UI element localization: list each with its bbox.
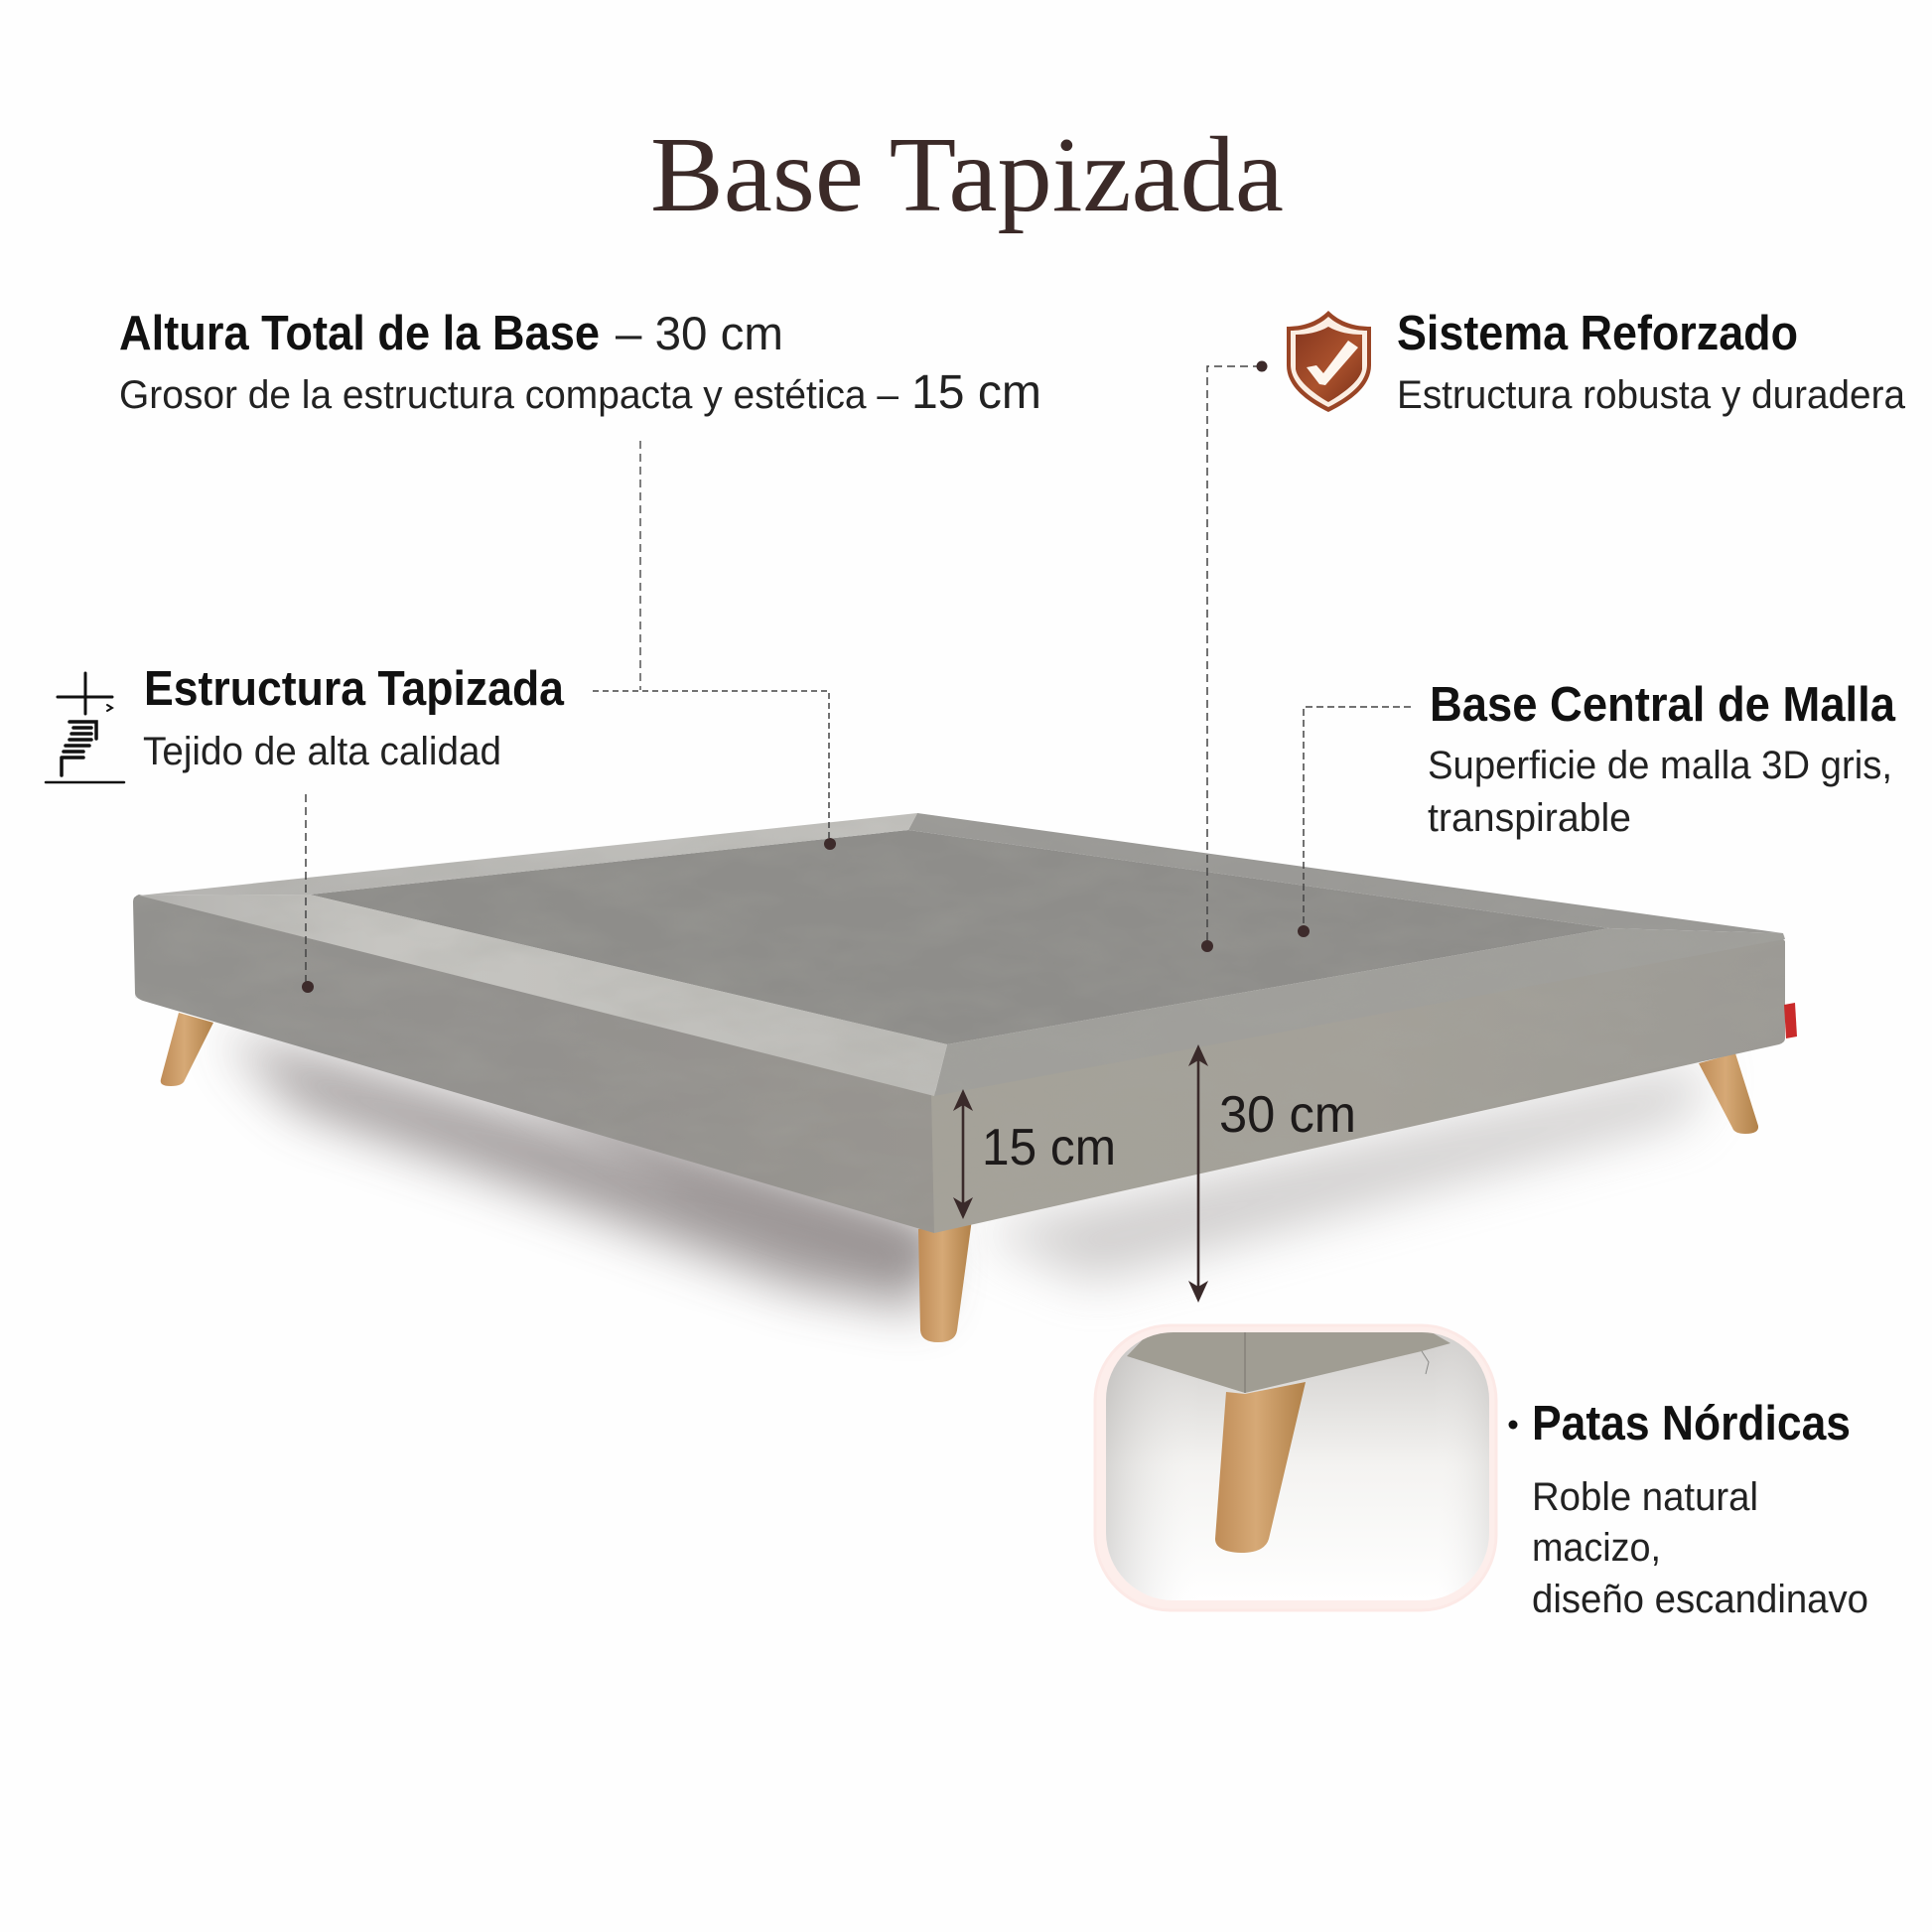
text block: patas nordicas: Roble natural <box>1532 1475 1758 1519</box>
leader: altura total <box>593 441 836 850</box>
text block: altura total <box>119 307 1041 419</box>
back right rail <box>908 813 1783 933</box>
arrow: 30 cm height <box>1188 1044 1208 1303</box>
inset fabric corner <box>1127 1332 1450 1393</box>
icon: fabric stack <box>46 673 124 782</box>
text block: base central de malla: Superficie de malla 3D gris, <box>1428 744 1892 787</box>
text block: patas nordicas: diseño escandinavo <box>1532 1578 1868 1621</box>
text block: estructura tapizada <box>143 662 565 773</box>
text block: sistema reforzado: Sistema Reforzado <box>1397 307 1798 360</box>
text block: patas nordicas: macizo, <box>1532 1526 1661 1570</box>
leg: rear left <box>161 1013 213 1086</box>
leg: front <box>918 1219 972 1342</box>
panel: leg detail inset <box>1095 1325 1496 1610</box>
left upholstered face <box>133 895 938 1233</box>
text block: estructura tapizada: Estructura Tapizada <box>144 662 565 716</box>
back left rail <box>139 813 917 896</box>
text block: base central de malla <box>1428 678 1896 840</box>
leg: rear right <box>1699 1053 1758 1134</box>
right upholstered face <box>931 933 1785 1233</box>
arrow: 15 cm height <box>953 1089 973 1219</box>
text block: altura total: – 30 cm <box>616 307 783 359</box>
text block: base central de malla: transpirable <box>1428 796 1631 840</box>
leader: estructura tapizada <box>302 794 314 993</box>
text block: base central de malla: Base Central de Malla <box>1430 678 1896 732</box>
label: 15 cm: 15 cm <box>982 1119 1116 1176</box>
text block: sistema reforzado: Estructura robusta y duradera <box>1397 373 1906 417</box>
icon: shield with check <box>1287 311 1371 412</box>
front right rail <box>934 928 1785 1096</box>
front left rail <box>139 895 947 1096</box>
mesh centre <box>310 830 1609 1044</box>
text block: patas nordicas <box>1509 1397 1868 1621</box>
bed base <box>133 813 1797 1342</box>
text block: altura total: 15 cm <box>911 366 1041 419</box>
floor shadow <box>223 1033 1708 1311</box>
fabric mottling <box>133 813 1785 1233</box>
text block: altura total: Grosor de la estructura compacta y estética – <box>119 373 899 417</box>
red label <box>1784 1003 1797 1038</box>
label: 30 cm: 30 cm <box>1219 1086 1356 1144</box>
text block: sistema reforzado <box>1397 307 1906 417</box>
leader: sistema reforzado <box>1201 361 1267 952</box>
leader: base central de malla <box>1298 707 1411 937</box>
title: Base Tapizada <box>650 116 1284 234</box>
text block: patas nordicas: Patas Nórdicas <box>1532 1397 1851 1450</box>
text block: estructura tapizada: Tejido de alta calidad <box>143 730 501 773</box>
inset wooden leg <box>1215 1382 1306 1553</box>
text block: altura total: Altura Total de la Base <box>119 307 600 360</box>
